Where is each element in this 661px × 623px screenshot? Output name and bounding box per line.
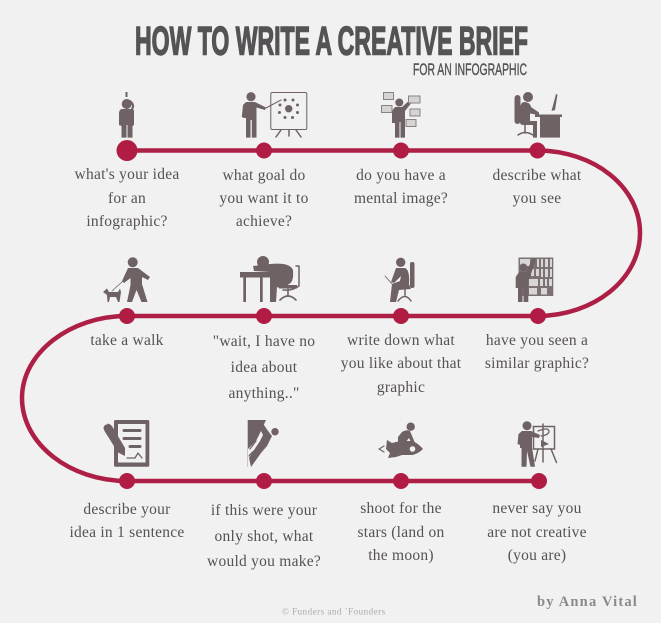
caption: step 1: what's your idea	[75, 166, 179, 183]
icon: person thinking	[119, 92, 134, 138]
caption: step 5: take a walk	[90, 332, 164, 349]
caption: step 11: stars (land on	[357, 524, 445, 541]
timeline dots	[116, 140, 547, 489]
icon: person at bookshelf	[516, 258, 553, 302]
caption: step 1: for an	[108, 190, 146, 207]
caption: step 8: have you seen a	[486, 332, 588, 349]
caption: step 8: similar graphic?	[485, 355, 589, 372]
icon: person riding rocket	[379, 422, 423, 458]
icon: person painting on easel	[518, 421, 556, 467]
icon: person asleep at table	[240, 256, 299, 302]
caption: step 7: you like about that	[341, 355, 462, 372]
caption: step 3: do you have a	[356, 167, 446, 184]
caption: step 10: would you make?	[207, 553, 321, 570]
caption: step 6: anything.."	[228, 385, 300, 402]
icon: person climbing	[248, 420, 279, 467]
caption: step 11: shoot for the	[360, 500, 442, 517]
caption: step 2: what goal do	[222, 167, 306, 184]
winding timeline path	[22, 150, 640, 481]
caption: step 12: never say you	[492, 500, 582, 517]
icon: person with mental images	[382, 92, 420, 138]
caption: step 7: graphic	[377, 379, 425, 396]
caption: step 1: infographic?	[86, 213, 168, 230]
icon: person with laptop on chair	[385, 258, 414, 302]
caption: step 4: you see	[513, 190, 561, 207]
author credit: by Anna Vital	[537, 594, 638, 610]
icon: person walking dog	[103, 257, 150, 302]
caption: step 2: achieve?	[236, 213, 292, 230]
caption: step 10: only shot, what	[215, 528, 314, 545]
copyright note: © Funders and `Founders	[282, 606, 386, 616]
subtitle: FOR AN INFOGRAPHIC	[413, 61, 527, 79]
caption: step 2: you want it to	[219, 190, 309, 207]
caption: step 3: mental image?	[354, 190, 448, 207]
caption: step 12: are not creative	[487, 524, 587, 541]
caption: step 6: "wait, I have no	[213, 333, 315, 350]
caption: step 12: (you are)	[508, 547, 566, 564]
caption: step 7: write down what	[347, 332, 455, 349]
icon: person presenting at board	[242, 92, 307, 138]
caption: step 6: idea about	[231, 359, 298, 376]
icon: person at desk	[514, 92, 562, 138]
caption: step 11: the moon)	[368, 547, 434, 564]
caption: step 9: describe your	[83, 501, 171, 518]
caption: step 9: idea in 1 sentence	[69, 524, 185, 541]
icon: document with pencil	[104, 420, 149, 467]
caption: step 4: describe what	[493, 167, 582, 184]
caption: step 10: if this were your	[211, 502, 318, 519]
